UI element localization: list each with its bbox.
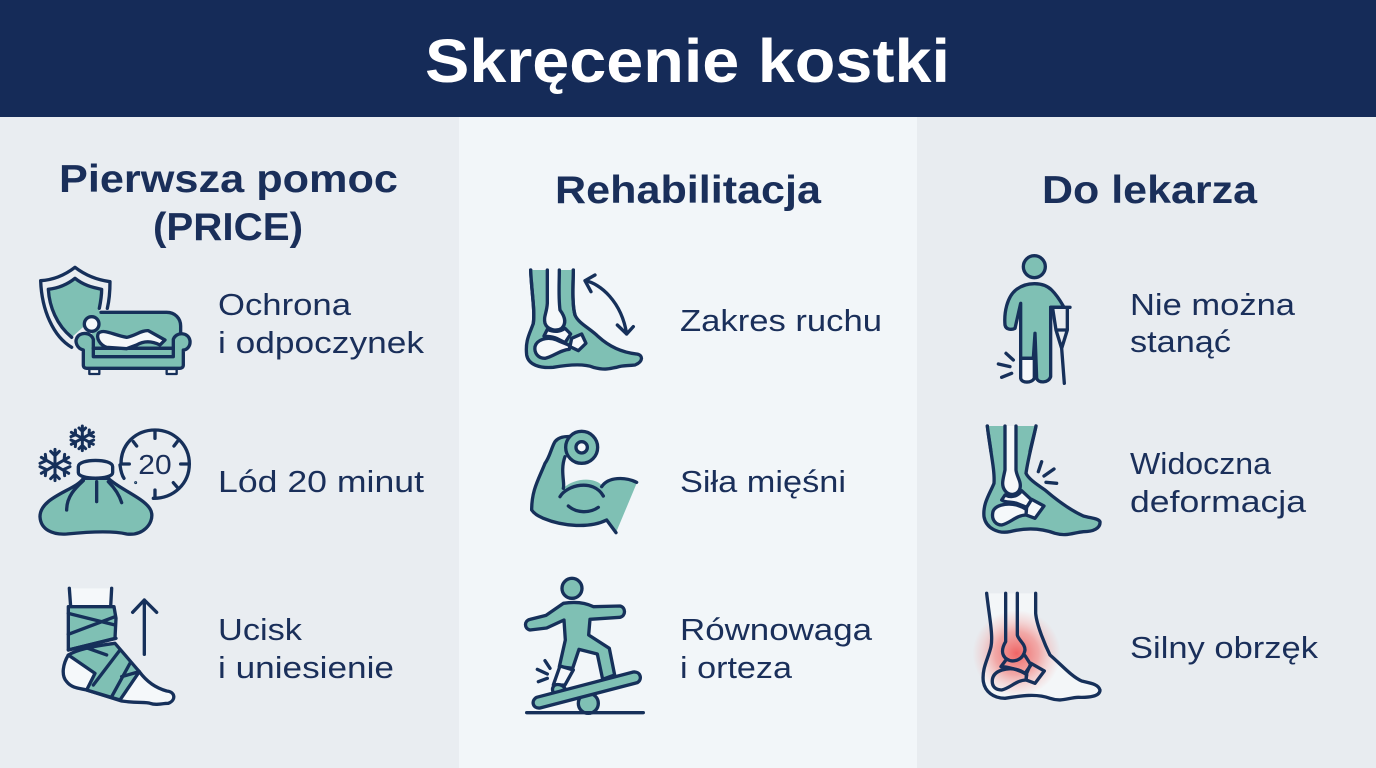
panel: rehabilitation background: [459, 117, 917, 768]
label: compression and elevation: i uniesienie: [218, 650, 394, 685]
icon: flexed arm with dumbbell: [532, 431, 637, 533]
icon: person with crutch: [998, 256, 1070, 383]
label: visible deformity: [1130, 446, 1307, 519]
label: balance and brace: Równowaga: [680, 612, 873, 647]
label: balance and brace: i orteza: [680, 650, 793, 685]
label: protection and rest: i odpoczynek: [218, 325, 425, 360]
icon: compression bandage with elevation arrow: [63, 588, 174, 704]
label: severe swelling: Silny obrzęk: [1130, 630, 1319, 665]
label: protection and rest: Ochrona: [218, 287, 352, 322]
header band: [0, 0, 1376, 117]
heading: doctor: Do lekarza: [1042, 169, 1257, 212]
icon: severe swelling: [973, 593, 1100, 700]
label: muscle strength: Siła mięśni: [680, 464, 846, 499]
label: cannot stand: Nie można: [1130, 287, 1296, 322]
label: visible deformity: Widoczna: [1130, 446, 1272, 481]
label: balance and brace: [680, 612, 873, 685]
icon: ankle deformity: [984, 426, 1100, 535]
icon: ice bag with timer: [40, 426, 189, 534]
icon: ice bag with timer: 20: [138, 449, 172, 480]
heading: first aid: Pierwsza pomoc: [59, 158, 398, 201]
label: compression and elevation: Ucisk: [218, 612, 303, 647]
title: Skręcenie kostki: [425, 27, 950, 95]
label: cannot stand: stanąć: [1130, 324, 1231, 359]
label: ice 20 minutes: Lód 20 minut: [218, 464, 424, 499]
label: cannot stand: [1130, 287, 1296, 359]
panel: doctor background: [917, 117, 1376, 768]
heading: first aid: (PRICE): [153, 206, 303, 249]
icon: foot range of motion: [526, 270, 641, 369]
label: protection and rest: [218, 287, 425, 360]
label: range of motion: Zakres ruchu: [680, 303, 882, 338]
heading: rehabilitation: Rehabilitacja: [555, 169, 821, 212]
label: compression and elevation: [218, 612, 394, 685]
icon: shield and sofa: [41, 267, 190, 374]
icon: balance board figure: [525, 578, 643, 713]
heading: first aid: [59, 158, 398, 249]
panel: first aid background: [0, 117, 459, 768]
label: visible deformity: deformacja: [1130, 484, 1307, 519]
